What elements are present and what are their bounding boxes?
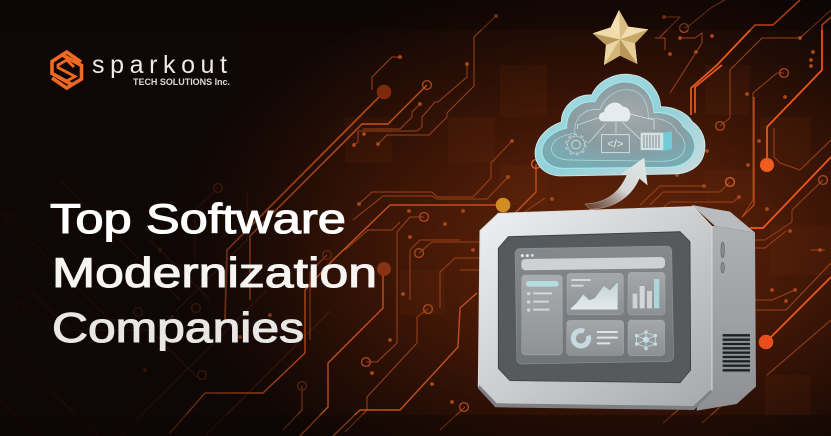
device top side [692, 205, 755, 233]
bar chart tile [628, 272, 665, 315]
device illustration [478, 205, 756, 411]
area chart tile [567, 273, 623, 315]
icon: gold star [593, 10, 648, 65]
cloud body [535, 74, 705, 176]
logo [52, 51, 230, 88]
solder dots [143, 14, 822, 404]
vent grille [723, 334, 750, 373]
address bar [521, 257, 665, 270]
medium traces [170, 85, 536, 436]
title [50, 195, 377, 351]
network tile [628, 320, 665, 356]
sidebar tile [522, 275, 562, 355]
port slots [721, 242, 724, 273]
screen bezel [498, 232, 691, 383]
icon: container [641, 131, 672, 151]
title line 2: Modernization [52, 249, 377, 296]
upward arrow [585, 158, 647, 209]
logo wordmark: sparkout [92, 51, 227, 79]
window dots [521, 254, 534, 257]
bright traces [691, 0, 831, 342]
icon: code box: </> [607, 138, 624, 150]
node line with taper [225, 92, 384, 320]
connector lines [577, 114, 654, 143]
glass panel [515, 246, 674, 364]
icon: code box [602, 135, 629, 153]
faint far-left traces [0, 180, 330, 436]
logo mark [52, 52, 82, 88]
logo tagline: TECH SOLUTIONS Inc. [133, 77, 230, 87]
title line 1: Top Software [50, 195, 346, 242]
icon: gear [566, 134, 594, 155]
device side [697, 226, 756, 411]
dim traces [283, 0, 831, 432]
device front [478, 207, 712, 407]
title line 3: Companies [52, 304, 304, 351]
small cloud icon [599, 103, 630, 121]
trace nodes [1, 85, 774, 349]
cloud illustration [535, 74, 705, 209]
donut tile [567, 320, 624, 355]
cloud inner glass [542, 82, 695, 168]
